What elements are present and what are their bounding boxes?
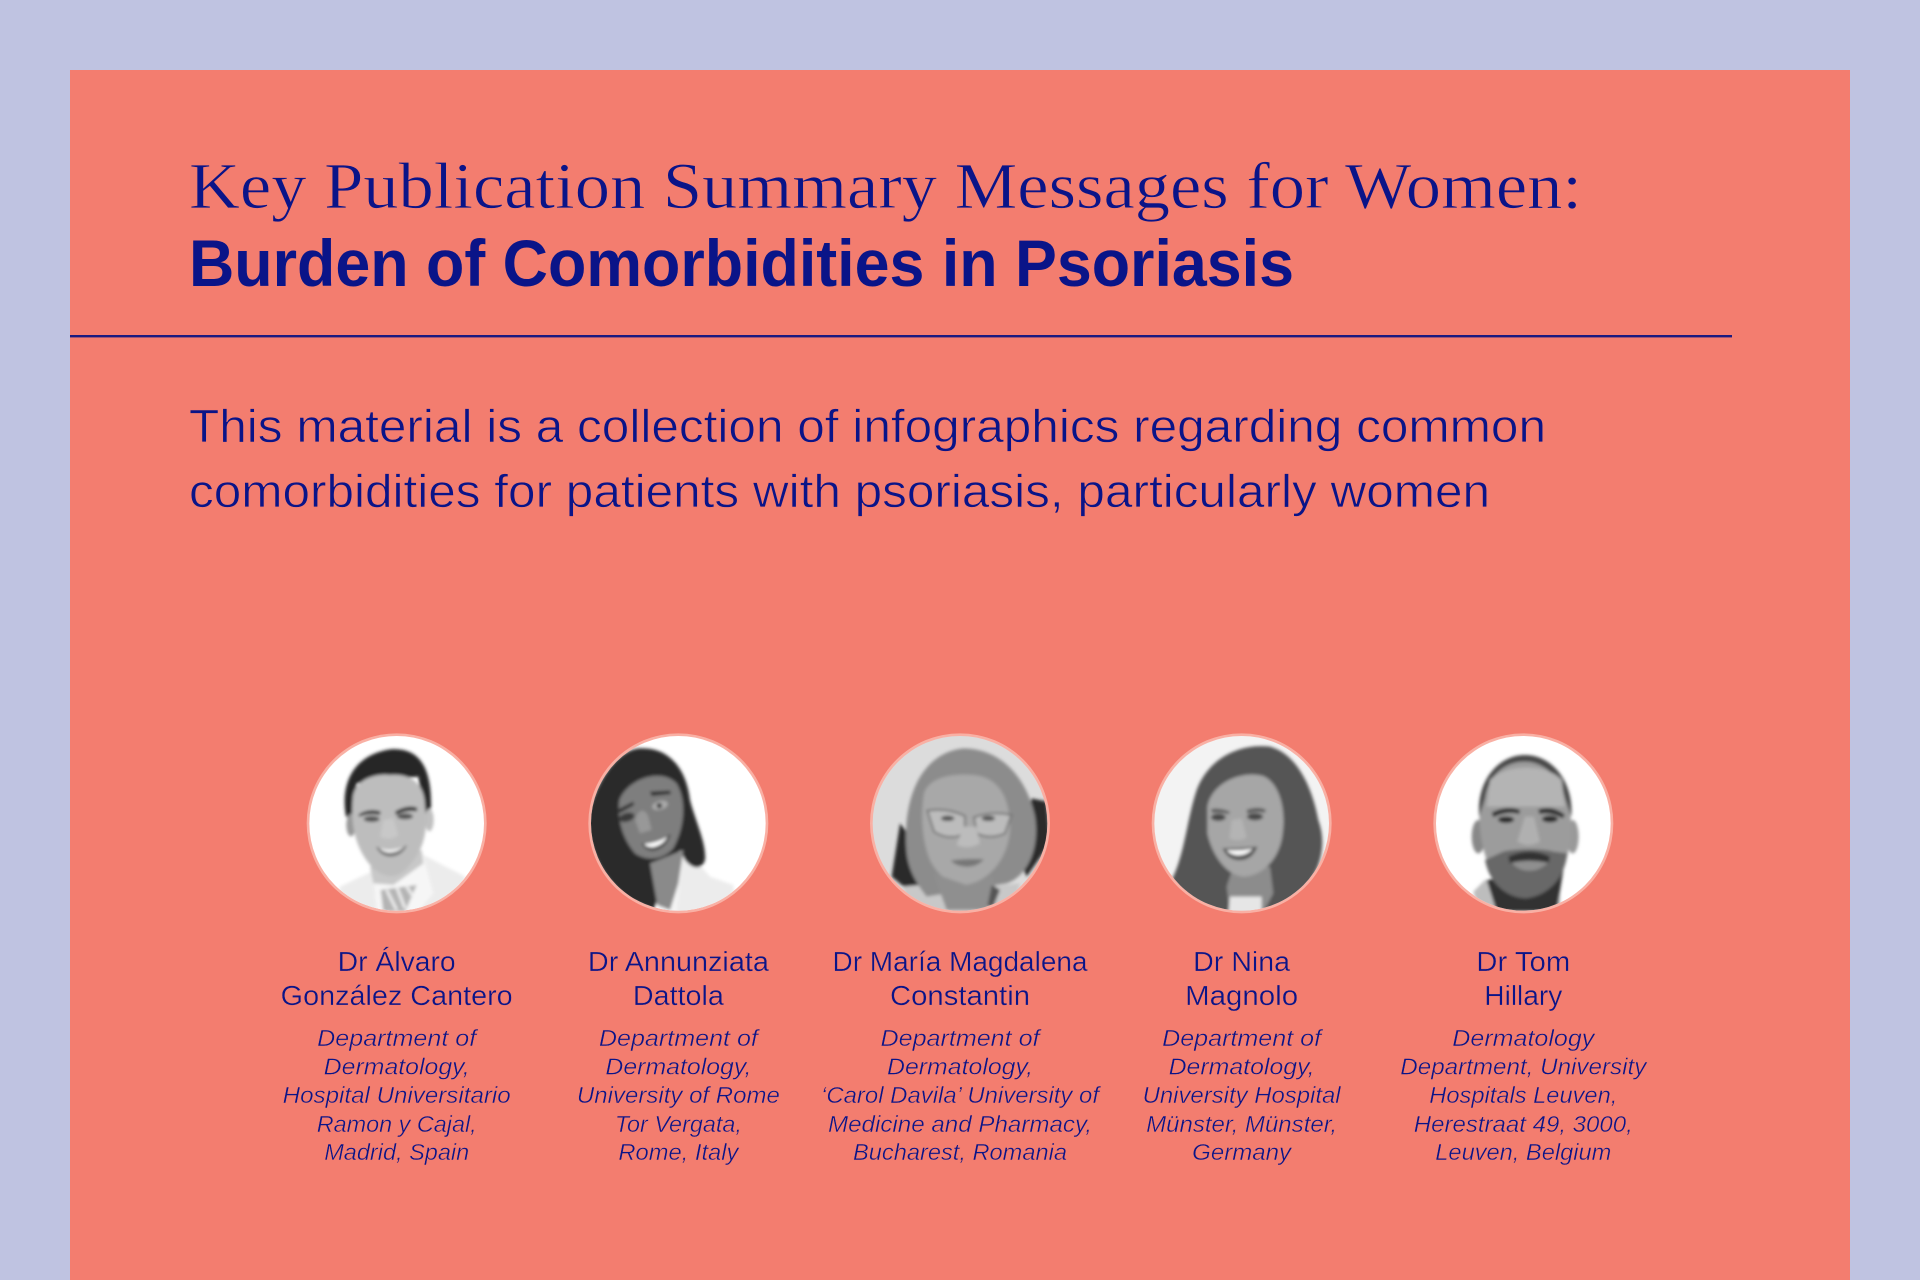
name — [281, 946, 513, 1011]
affiliation: Dermatology, — [1169, 1054, 1315, 1080]
affiliation: University of Rome — [577, 1082, 780, 1108]
affiliation: Rome, Italy — [618, 1139, 740, 1165]
portrait: Dr Nina Magnolo — [1150, 730, 1337, 920]
affiliation — [1143, 1025, 1341, 1165]
affiliation: Ramon y Cajal, — [317, 1111, 477, 1137]
name — [1476, 946, 1570, 1011]
affiliation: Department of — [1162, 1025, 1324, 1051]
affiliation: Herestraat 49, 3000, — [1414, 1111, 1633, 1137]
author: Dr Tom Hillary — [1400, 730, 1648, 1165]
affiliation: Department of — [317, 1025, 479, 1051]
portrait: Dr Álvaro González Cantero — [303, 730, 490, 920]
name: Dr María Magdalena — [832, 946, 1088, 977]
affiliation: Dermatology, — [605, 1054, 751, 1080]
affiliation — [577, 1025, 780, 1165]
affiliation: Department of — [599, 1025, 761, 1051]
affiliation: Department, University — [1400, 1054, 1648, 1080]
intro text: comorbidities for patients with psoriasis, particularly women — [189, 465, 1490, 517]
name: González Cantero — [281, 980, 513, 1011]
author: Dr Annunziata Dattola — [577, 730, 780, 1165]
affiliation: Hospitals Leuven, — [1429, 1082, 1617, 1108]
author: Dr Álvaro González Cantero — [281, 730, 513, 1165]
affiliation: Hospital Universitario — [283, 1082, 511, 1108]
name — [588, 946, 770, 1011]
author: Dr Nina Magnolo — [1143, 730, 1341, 1165]
title: Key Publication Summary Messages for Women: — [189, 150, 1582, 223]
name: Dattola — [633, 980, 725, 1011]
affiliation: Dermatology — [1452, 1025, 1596, 1051]
intro text — [189, 400, 1546, 517]
name: Dr Álvaro — [338, 946, 456, 977]
portrait: Dr Annunziata Dattola — [588, 733, 768, 914]
name — [832, 946, 1088, 1011]
affiliation: Dermatology, — [324, 1054, 470, 1080]
author: Dr María Magdalena Constantin — [821, 730, 1102, 1165]
affiliation: ‘Carol Davila’ University of — [821, 1082, 1102, 1108]
portrait: Dr María Magdalena Constantin — [867, 730, 1057, 920]
affiliation — [283, 1025, 511, 1165]
affiliation: Münster, Münster, — [1146, 1111, 1337, 1137]
name — [1185, 946, 1298, 1011]
title — [189, 150, 1582, 300]
intro text: This material is a collection of infographics regarding common — [189, 400, 1546, 452]
affiliation: University Hospital — [1143, 1082, 1341, 1108]
name: Dr Tom — [1476, 946, 1570, 977]
affiliation: Medicine and Pharmacy, — [828, 1111, 1092, 1137]
affiliation: Bucharest, Romania — [853, 1139, 1067, 1165]
name: Magnolo — [1185, 980, 1298, 1011]
affiliation: Tor Vergata, — [615, 1111, 742, 1137]
affiliation — [1400, 1025, 1648, 1165]
affiliation: Department of — [880, 1025, 1042, 1051]
affiliation: Dermatology, — [887, 1054, 1033, 1080]
name: Hillary — [1484, 980, 1563, 1011]
portrait: Dr Tom Hillary — [1430, 730, 1617, 917]
affiliation: Madrid, Spain — [324, 1139, 469, 1165]
title: Burden of Comorbidities in Psoriasis — [189, 226, 1294, 300]
name: Dr Annunziata — [588, 946, 770, 977]
affiliation: Germany — [1192, 1139, 1292, 1165]
affiliation: Leuven, Belgium — [1435, 1139, 1611, 1165]
affiliation — [821, 1025, 1102, 1165]
name: Dr Nina — [1193, 946, 1291, 977]
panel: authors — [281, 730, 1648, 1165]
name: Constantin — [890, 980, 1030, 1011]
